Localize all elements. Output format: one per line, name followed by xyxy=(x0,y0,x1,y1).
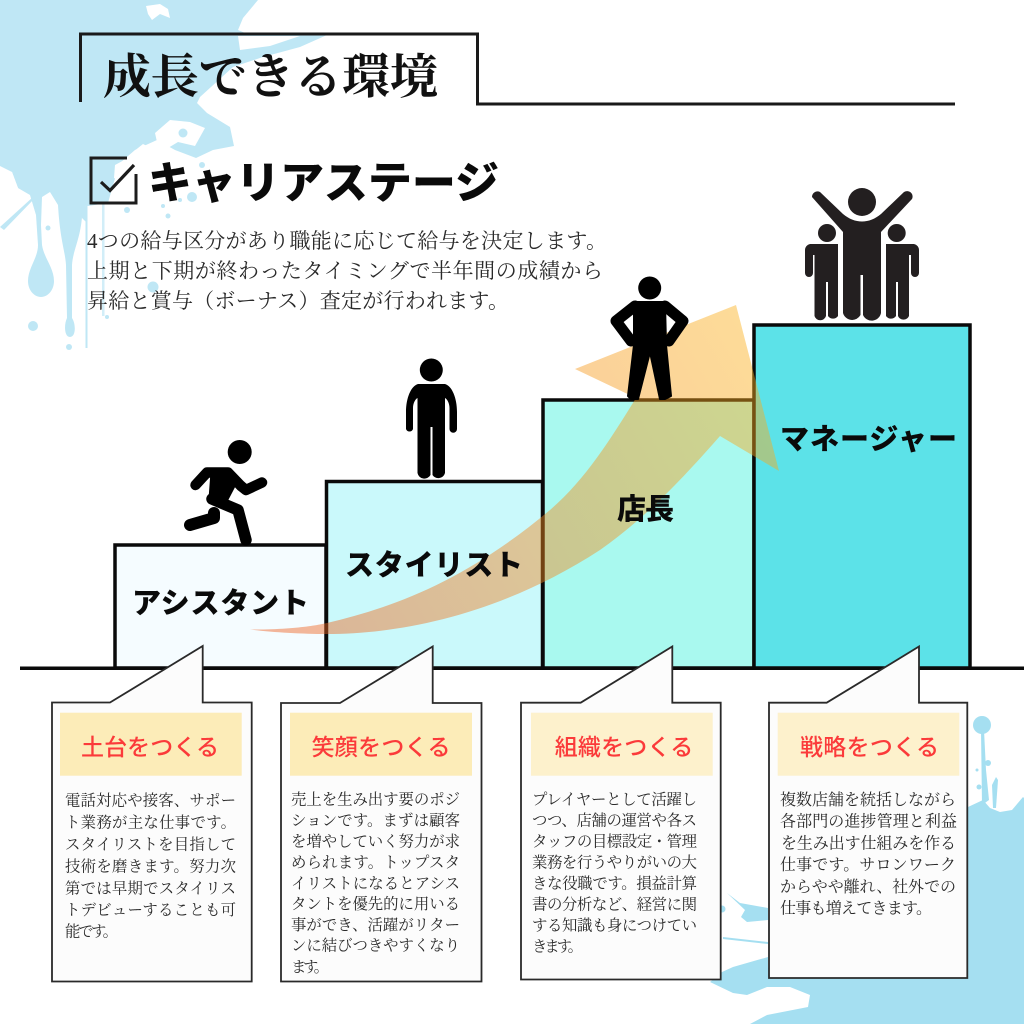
step box: manager xyxy=(754,325,970,668)
card: stylist: 笑顔をつくる xyxy=(312,728,450,762)
ground line xyxy=(20,666,1024,670)
card: stylist: 売上を生み出す要のポジ xyxy=(291,790,460,808)
card: assistant: 能です。 xyxy=(65,922,118,940)
label: stylist: スタイリスト xyxy=(345,542,523,584)
label: manager: マネージャー xyxy=(780,416,957,458)
step box: store manager xyxy=(543,400,754,668)
card: manager: からやや離れ、社外での xyxy=(780,878,956,896)
card: stylist xyxy=(281,646,482,982)
card: assistant: 電話対応や接客、サポー xyxy=(65,790,236,810)
card: manager: 仕事も増えてきます。 xyxy=(780,900,932,918)
title frame xyxy=(80,34,955,104)
icon: checkbox xyxy=(91,158,136,203)
card: manager: 各部門の進捗管理と利益 xyxy=(780,812,957,830)
intro text: 昇給と賞与（ボーナス）査定が行われます。 xyxy=(87,289,509,313)
card: store manager: 組織をつくる xyxy=(555,728,693,762)
label: assistant: アシスタント xyxy=(132,580,309,622)
growth arrow xyxy=(250,305,779,634)
background: paint splash top left xyxy=(0,0,327,350)
card: stylist: を増やしていく努力が求 xyxy=(291,832,460,850)
card: stylist: タントを優先的に用いる xyxy=(291,895,460,913)
icon: standing person xyxy=(406,358,457,479)
step box: assistant xyxy=(115,545,326,668)
icon: person with hands on hips xyxy=(616,276,683,399)
card: assistant xyxy=(52,646,252,982)
card: stylist: イリストになるとアシス xyxy=(291,874,460,892)
card: manager: 複数店舗を統括しながら xyxy=(780,791,956,809)
step box: stylist xyxy=(326,482,542,668)
label: store manager: 店長 xyxy=(617,486,674,528)
title: 成長できる環境 xyxy=(103,51,438,104)
background: paint splash bottom right xyxy=(710,716,1024,1024)
card: store manager: 書の分析など、経営に関 xyxy=(532,896,697,914)
card: stylist: ションです。まずは顧客 xyxy=(291,810,460,830)
card: store manager: プレイヤーとして活躍し xyxy=(532,790,697,808)
card: store manager: きます。 xyxy=(532,938,583,956)
card: stylist: ます。 xyxy=(291,959,329,976)
card: store manager: つつ、店舗の運営や各ス xyxy=(532,812,697,830)
intro text: 上期と下期が終わったタイミングで半年間の成績から xyxy=(87,259,603,283)
icon: running person xyxy=(190,440,262,540)
card: manager: 戦略をつくる xyxy=(800,728,939,762)
subheading: キャリアステージ xyxy=(148,159,499,208)
card: assistant: 技術を磨きます。努力次 xyxy=(65,856,236,876)
card: store manager xyxy=(521,646,721,980)
card: stylist: められます。トップスタ xyxy=(291,854,460,872)
card: assistant: 土台をつくる xyxy=(81,728,219,762)
card: stylist: ンに結びつきやすくなり xyxy=(291,936,460,954)
card: assistant: スタイリストを目指して xyxy=(65,836,236,854)
intro text: 4つの給与区分があり職能に応じて給与を決定します。 xyxy=(87,229,607,253)
intro text xyxy=(87,229,607,313)
card: store manager: きな役職です。損益計算 xyxy=(532,874,697,892)
icon: group of three people cheering xyxy=(805,188,919,321)
card: manager: 仕事です。サロンワーク xyxy=(780,856,956,874)
card: manager xyxy=(769,646,967,978)
card: store manager: する知識も身につけてい xyxy=(532,916,697,934)
background: white flecks in top splash xyxy=(0,4,300,212)
card: assistant: トデビューすることも可 xyxy=(65,901,236,919)
card: assistant: 第では早期でスタイリス xyxy=(65,880,236,898)
card: stylist: 事ができ、活躍がリター xyxy=(291,916,460,934)
card: store manager: タッフの目標設定・管理 xyxy=(532,832,698,850)
card: assistant: ト業務が主な仕事です。 xyxy=(65,814,236,832)
card: store manager: 業務を行うやりがいの大 xyxy=(532,854,697,872)
card: manager: を生み出す仕組みを作る xyxy=(781,834,956,852)
